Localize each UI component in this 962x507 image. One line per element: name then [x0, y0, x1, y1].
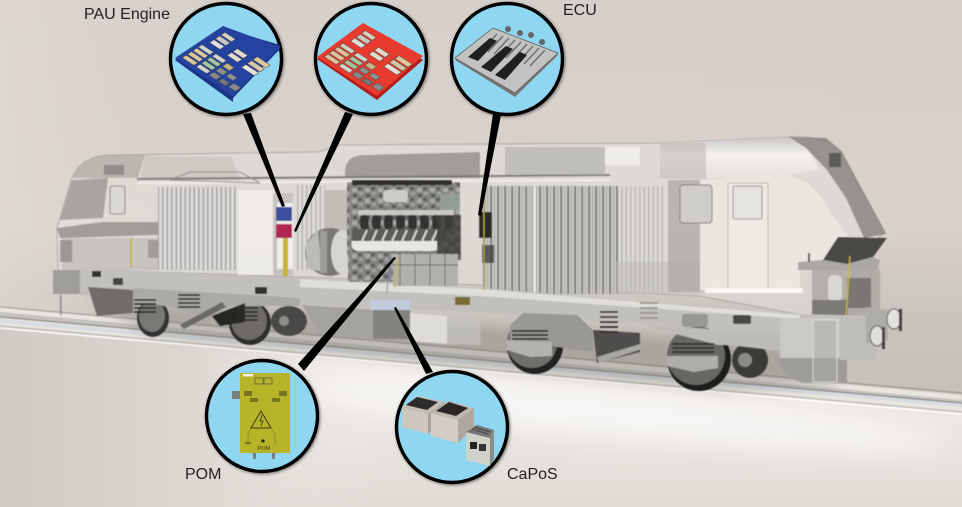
mid radiator [295, 185, 325, 270]
rail track [0, 307, 962, 414]
nose console [798, 237, 887, 318]
exhaust manifold [352, 241, 438, 251]
connector line: ECU [478, 114, 501, 216]
label: POM: POM [185, 466, 221, 483]
left radiator [158, 187, 238, 270]
locomotive frame [53, 268, 880, 335]
engine [347, 180, 461, 292]
callout: red PAU board [315, 3, 429, 117]
callout: PAU Engine board [170, 3, 284, 117]
generator [305, 228, 355, 276]
windshield [789, 137, 886, 238]
underframe tank [302, 300, 480, 345]
left cab [57, 155, 240, 270]
left bogie [88, 287, 307, 345]
PAU Engine board [276, 207, 292, 221]
callout: POM panel [206, 360, 320, 474]
callout: POM panel: POM [258, 446, 271, 452]
callout: CaPoS modules [396, 371, 510, 485]
connector line: PAU Engine [243, 113, 285, 207]
label: PAU Engine: PAU Engine [84, 6, 170, 23]
right bogie springs [512, 312, 714, 352]
label: ECU: ECU [563, 2, 597, 19]
under-loco shadow [90, 300, 840, 390]
right cab [668, 175, 850, 293]
front plow and buffers [778, 307, 902, 383]
connector line: POM [298, 257, 396, 371]
equipment cabinet [273, 193, 293, 276]
callout: ECU module [451, 3, 565, 117]
locomotive [53, 137, 902, 391]
engine cylinders [360, 215, 453, 229]
label: CaPoS: CaPoS [507, 466, 558, 483]
left bogie springs [134, 295, 258, 320]
white panel [238, 190, 273, 275]
right bogie [507, 303, 800, 391]
right radiator [482, 186, 618, 294]
roof rail [137, 175, 610, 179]
roof equipment [170, 147, 640, 183]
connector line: CaPoS [394, 307, 433, 374]
ECU module on radiator [479, 186, 494, 290]
connector line: PAU Red [294, 112, 353, 232]
body shell [57, 137, 885, 322]
PAU Red board [276, 224, 292, 238]
